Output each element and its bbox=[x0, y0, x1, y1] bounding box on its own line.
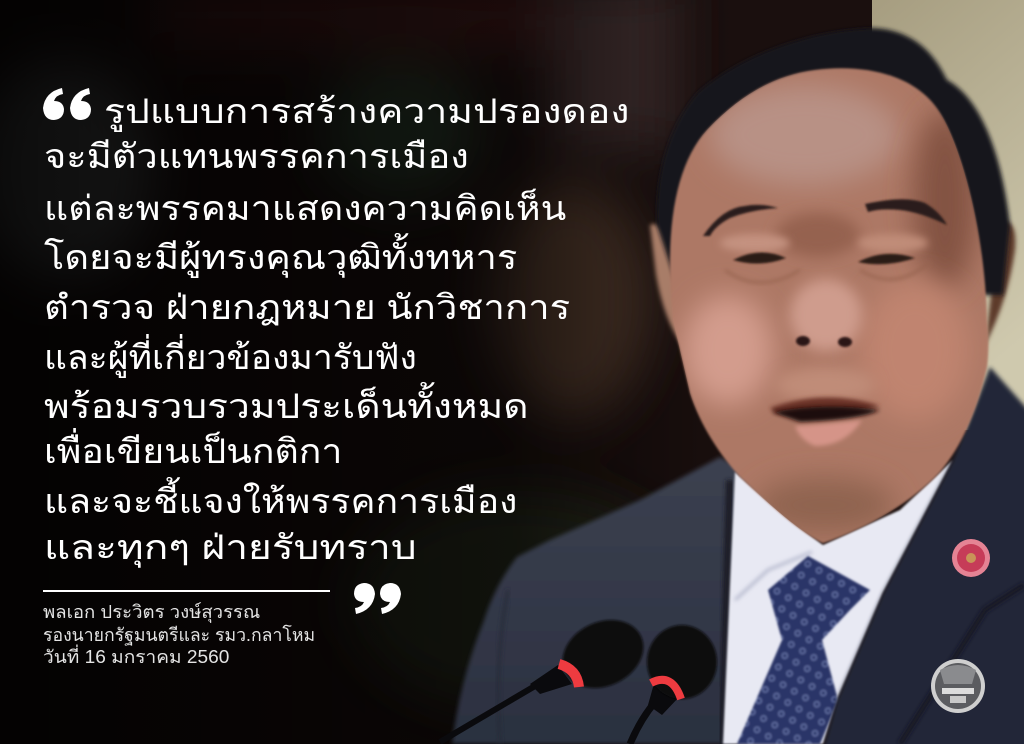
head bbox=[650, 28, 1015, 543]
left cheek bbox=[683, 295, 773, 405]
quote text: และจะชี้แจงให้พรรคการเมือง bbox=[44, 483, 517, 521]
ears bbox=[650, 224, 682, 345]
forehead bbox=[710, 85, 900, 185]
quote text: จะมีตัวแทนพรรคการเมือง bbox=[44, 138, 469, 176]
blurred background figures bbox=[0, 0, 690, 710]
shirt shadow bbox=[735, 552, 812, 600]
lid left bbox=[720, 234, 790, 252]
muzzle bbox=[778, 366, 870, 399]
eyes bbox=[733, 252, 786, 264]
face shading bbox=[683, 85, 977, 533]
quote text: ตำรวจ ฝ่ายกฎหมาย นักวิชาการ bbox=[44, 289, 570, 327]
eyebrows bbox=[703, 205, 778, 236]
mouth bbox=[770, 397, 880, 415]
quote text bbox=[44, 93, 629, 568]
eye bags bbox=[725, 270, 800, 282]
quote text: เพื่อเขียนเป็นกติกา bbox=[44, 433, 342, 471]
necktie bbox=[737, 556, 870, 744]
quote text: รูปแบบการสร้างความปรองดอง bbox=[104, 93, 629, 131]
right cheek bbox=[860, 280, 970, 420]
lapel pin bbox=[952, 539, 990, 577]
speaker attribution: รองนายกรัฐมนตรีและ รมว.กลาโหม bbox=[43, 625, 315, 645]
nose bbox=[790, 279, 862, 351]
speaker attribution bbox=[43, 602, 315, 667]
quote text: พร้อมรวบรวมประเด็นทั้งหมด bbox=[44, 388, 529, 426]
closing quotation mark bbox=[354, 583, 401, 614]
microphones bbox=[440, 607, 717, 744]
under lip bbox=[755, 477, 895, 533]
brow shadow bbox=[776, 213, 860, 257]
suit jacket bbox=[452, 457, 745, 744]
opening quotation mark bbox=[43, 88, 91, 120]
quote text: และผู้ที่เกี่ยวข้องมารับฟัง bbox=[44, 339, 417, 377]
temple shadow bbox=[913, 110, 977, 290]
face bbox=[670, 68, 988, 543]
quote text: และทุกๆ ฝ่ายรับทราบ bbox=[44, 529, 417, 567]
quote text: โดยจะมีผู้ทรงคุณวุฒิทั้งทหาร bbox=[44, 239, 517, 277]
shirt collar bbox=[723, 460, 953, 744]
right lapel bbox=[823, 367, 1024, 744]
divider line bbox=[43, 590, 330, 592]
government seal bbox=[931, 659, 985, 713]
speaker attribution: วันที่ 16 มกราคม 2560 bbox=[43, 647, 229, 667]
quote text: แต่ละพรรคมาแสดงความคิดเห็น bbox=[44, 190, 566, 228]
hair bbox=[657, 28, 1010, 295]
beige wall bbox=[872, 0, 1024, 430]
lid right bbox=[858, 234, 928, 252]
speaker attribution: พลเอก ประวิตร วงษ์สุวรรณ bbox=[43, 602, 260, 622]
